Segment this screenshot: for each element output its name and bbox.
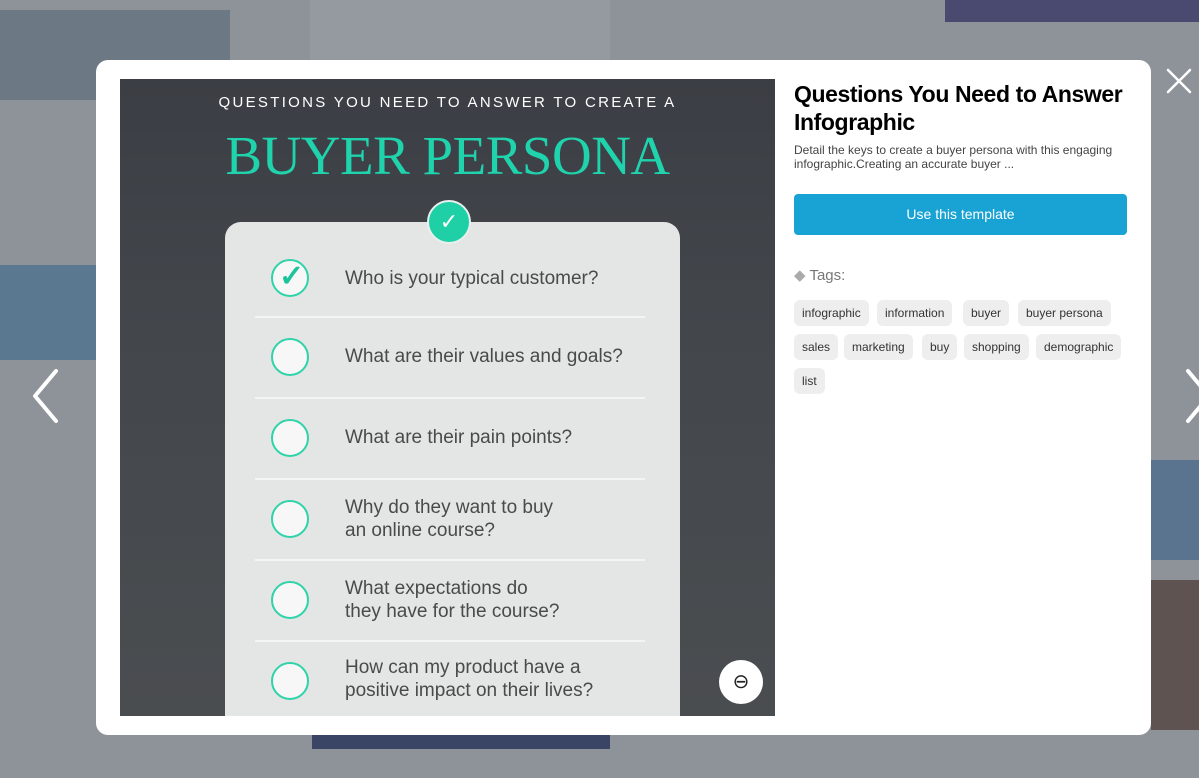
modal (96, 60, 1151, 735)
button: use template: Use this template (906, 206, 1015, 222)
question 2 (255, 318, 645, 399)
question 4 (255, 480, 645, 561)
question 5: they have for the course? (345, 601, 559, 622)
subtitle: QUESTIONS YOU NEED TO ANSWER TO CREATE A (219, 94, 676, 111)
close button (1166, 68, 1192, 94)
question 4: an online course? (345, 520, 495, 541)
card: question list (225, 222, 680, 742)
icon: zoom button: ⊖ (733, 671, 749, 693)
question 4: Why do they want to buy (345, 497, 553, 518)
icon: zoom button (719, 660, 763, 704)
tags list: marketing (852, 340, 905, 354)
description: Detail the keys to create a buyer persona with this engaging infographic.Creating an accurate buyer ... (794, 143, 1112, 171)
tags list: buyer persona (1026, 306, 1103, 320)
button: use template (794, 194, 1127, 235)
question 3 (255, 399, 645, 480)
tags list: demographic (1044, 340, 1113, 354)
tags list: information (885, 306, 944, 320)
tags list: infographic (802, 306, 861, 320)
tags list: list (802, 374, 817, 388)
question 2: What are their values and goals? (345, 346, 623, 367)
tags list: buyer (971, 306, 1001, 320)
tags heading: ◆ Tags: (794, 267, 845, 284)
tags list: sales (802, 340, 830, 354)
question 5: What expectations do (345, 578, 528, 599)
question 1: Who is your typical customer? (345, 268, 598, 289)
heading: Questions You Need to Answer Infographic (794, 81, 1122, 135)
question 1: ✓ (279, 260, 304, 293)
question 6: How can my product have a (345, 657, 581, 678)
question 6: positive impact on their lives? (345, 680, 593, 701)
icon: top check badge (427, 200, 471, 244)
tags list: buy (930, 340, 949, 354)
title: BUYER PERSONA (225, 125, 670, 186)
icon: top check badge: ✓ (440, 209, 458, 234)
question 5 (255, 561, 645, 642)
infographic preview (120, 79, 775, 716)
question 6 (271, 657, 593, 701)
question 1 (255, 237, 645, 318)
tags list (794, 300, 1121, 394)
arrow: next (1186, 368, 1199, 424)
arrow: previous (33, 368, 58, 424)
tags list: shopping (972, 340, 1021, 354)
question 3: What are their pain points? (345, 427, 572, 448)
